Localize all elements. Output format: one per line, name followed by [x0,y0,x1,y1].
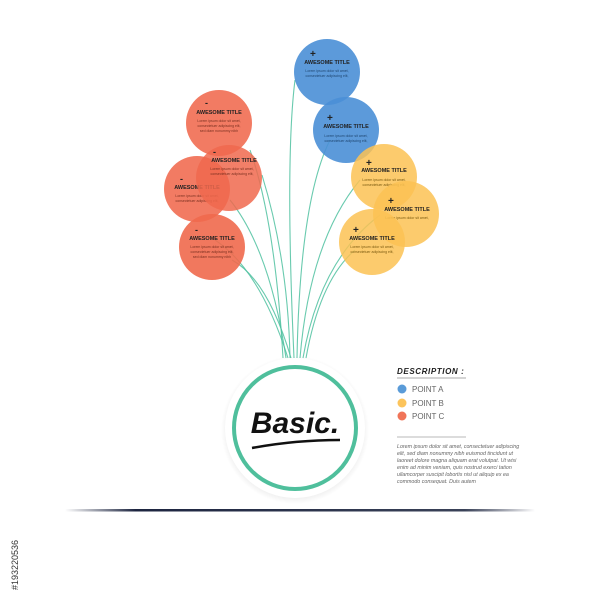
circle: yellow 1: Lorem ipsum dolor sit amet, [362,178,406,182]
legend: POINT A [412,385,444,394]
circle: yellow 2: Lorem ipsum dolor sit amet, [385,216,429,220]
circle: red 3 [164,156,230,222]
baseline [65,509,535,512]
circle: blue 2: + [327,113,333,124]
circle: red 2: consectetuer adipiscing elit, [210,172,254,176]
circle: red 3: AWESOME TITLE [174,185,220,191]
circle: yellow 3 [339,209,405,275]
circle: yellow 1: AWESOME TITLE [361,168,407,174]
circle: blue 2 [313,97,379,163]
circle: blue 2: Lorem ipsum dolor sit amet, [324,134,368,138]
description paragraph: ullamcorper suscipit lobortis nisl ut aliquip ex ea [397,472,509,478]
circle: yellow 2: + [388,196,394,207]
circle: red 1: - [205,98,208,108]
circle: red 1 [186,90,252,156]
circle: blue 1: + [310,49,316,60]
description paragraph: elit, sed diam nonummy nibh euismod tincidunt ut [397,451,514,457]
circle: red 2: AWESOME TITLE [211,158,257,164]
circle: red 3: - [180,174,183,184]
side id: #193220536 [10,540,20,590]
legend: DESCRIPTION : [397,367,464,376]
circle: red 1: consectetuer adipiscing elit, [198,124,241,128]
circle: red 2 [196,145,262,211]
circle: red 4 [179,214,245,280]
circle: red 1: AWESOME TITLE [196,110,242,116]
main circle [221,356,369,504]
legend: POINT B [412,399,444,408]
circle: yellow 1: + [366,158,372,169]
circle: red 4: Lorem ipsum dolor sit amet, [190,245,234,249]
circle: red 4: - [195,225,198,235]
description paragraph [397,444,519,485]
circle: red 2: Lorem ipsum dolor sit amet, [210,167,254,171]
circle: red 1: sed diam nonummy nibh [200,129,238,133]
circle: yellow 1 [351,144,417,210]
circle: red 4: AWESOME TITLE [189,236,235,242]
circle: blue 1: Lorem ipsum dolor sit amet, [305,69,349,73]
circle: red 4: sed diam nonummy nibh [193,255,231,259]
circle: red 3: consectetuer adipiscing elit, [176,199,219,203]
circle: blue 1: consectetuer adipiscing elit, [306,74,349,78]
circle: yellow 1: consectetuer adipiscing elit, [362,183,406,187]
legend: POINT C [412,412,445,421]
circle: blue 2: consectetuer adipiscing elit, [324,139,368,143]
circle: red 4: consectetuer adipiscing elit, [190,250,234,254]
circle: yellow 3: consectetuer adipiscing elit, [350,250,394,254]
description paragraph: laoreet dolore magna aliquam erat volutpat. Ut wisi [397,458,517,464]
description paragraph: Lorem ipsum dolor sit amet, consectetuer adipiscing [397,444,519,450]
circle: blue 2: AWESOME TITLE [323,124,369,130]
description paragraph: commodo consequat. Duis autem [397,479,476,485]
circle: red 1: Lorem ipsum dolor sit amet, [197,119,241,123]
circle: blue 1: AWESOME TITLE [304,60,350,66]
stems [215,80,380,358]
circle: blue 1 [294,39,360,105]
description paragraph: enim ad minim veniam, quis nostrud exerci tation [397,465,512,471]
circle: yellow 2: AWESOME TITLE [384,207,430,213]
circle: yellow 3: + [353,225,359,236]
legend [397,367,466,437]
circle: red 2: - [213,147,216,157]
circle: yellow 2 [373,181,439,247]
circle: red 3: Lorem ipsum dolor sit amet, [175,194,219,198]
circle: yellow 3: AWESOME TITLE [349,236,395,242]
title: Basic.: Basic. [251,407,339,440]
circle: yellow 3: Lorem ipsum dolor sit amet, [350,245,394,249]
